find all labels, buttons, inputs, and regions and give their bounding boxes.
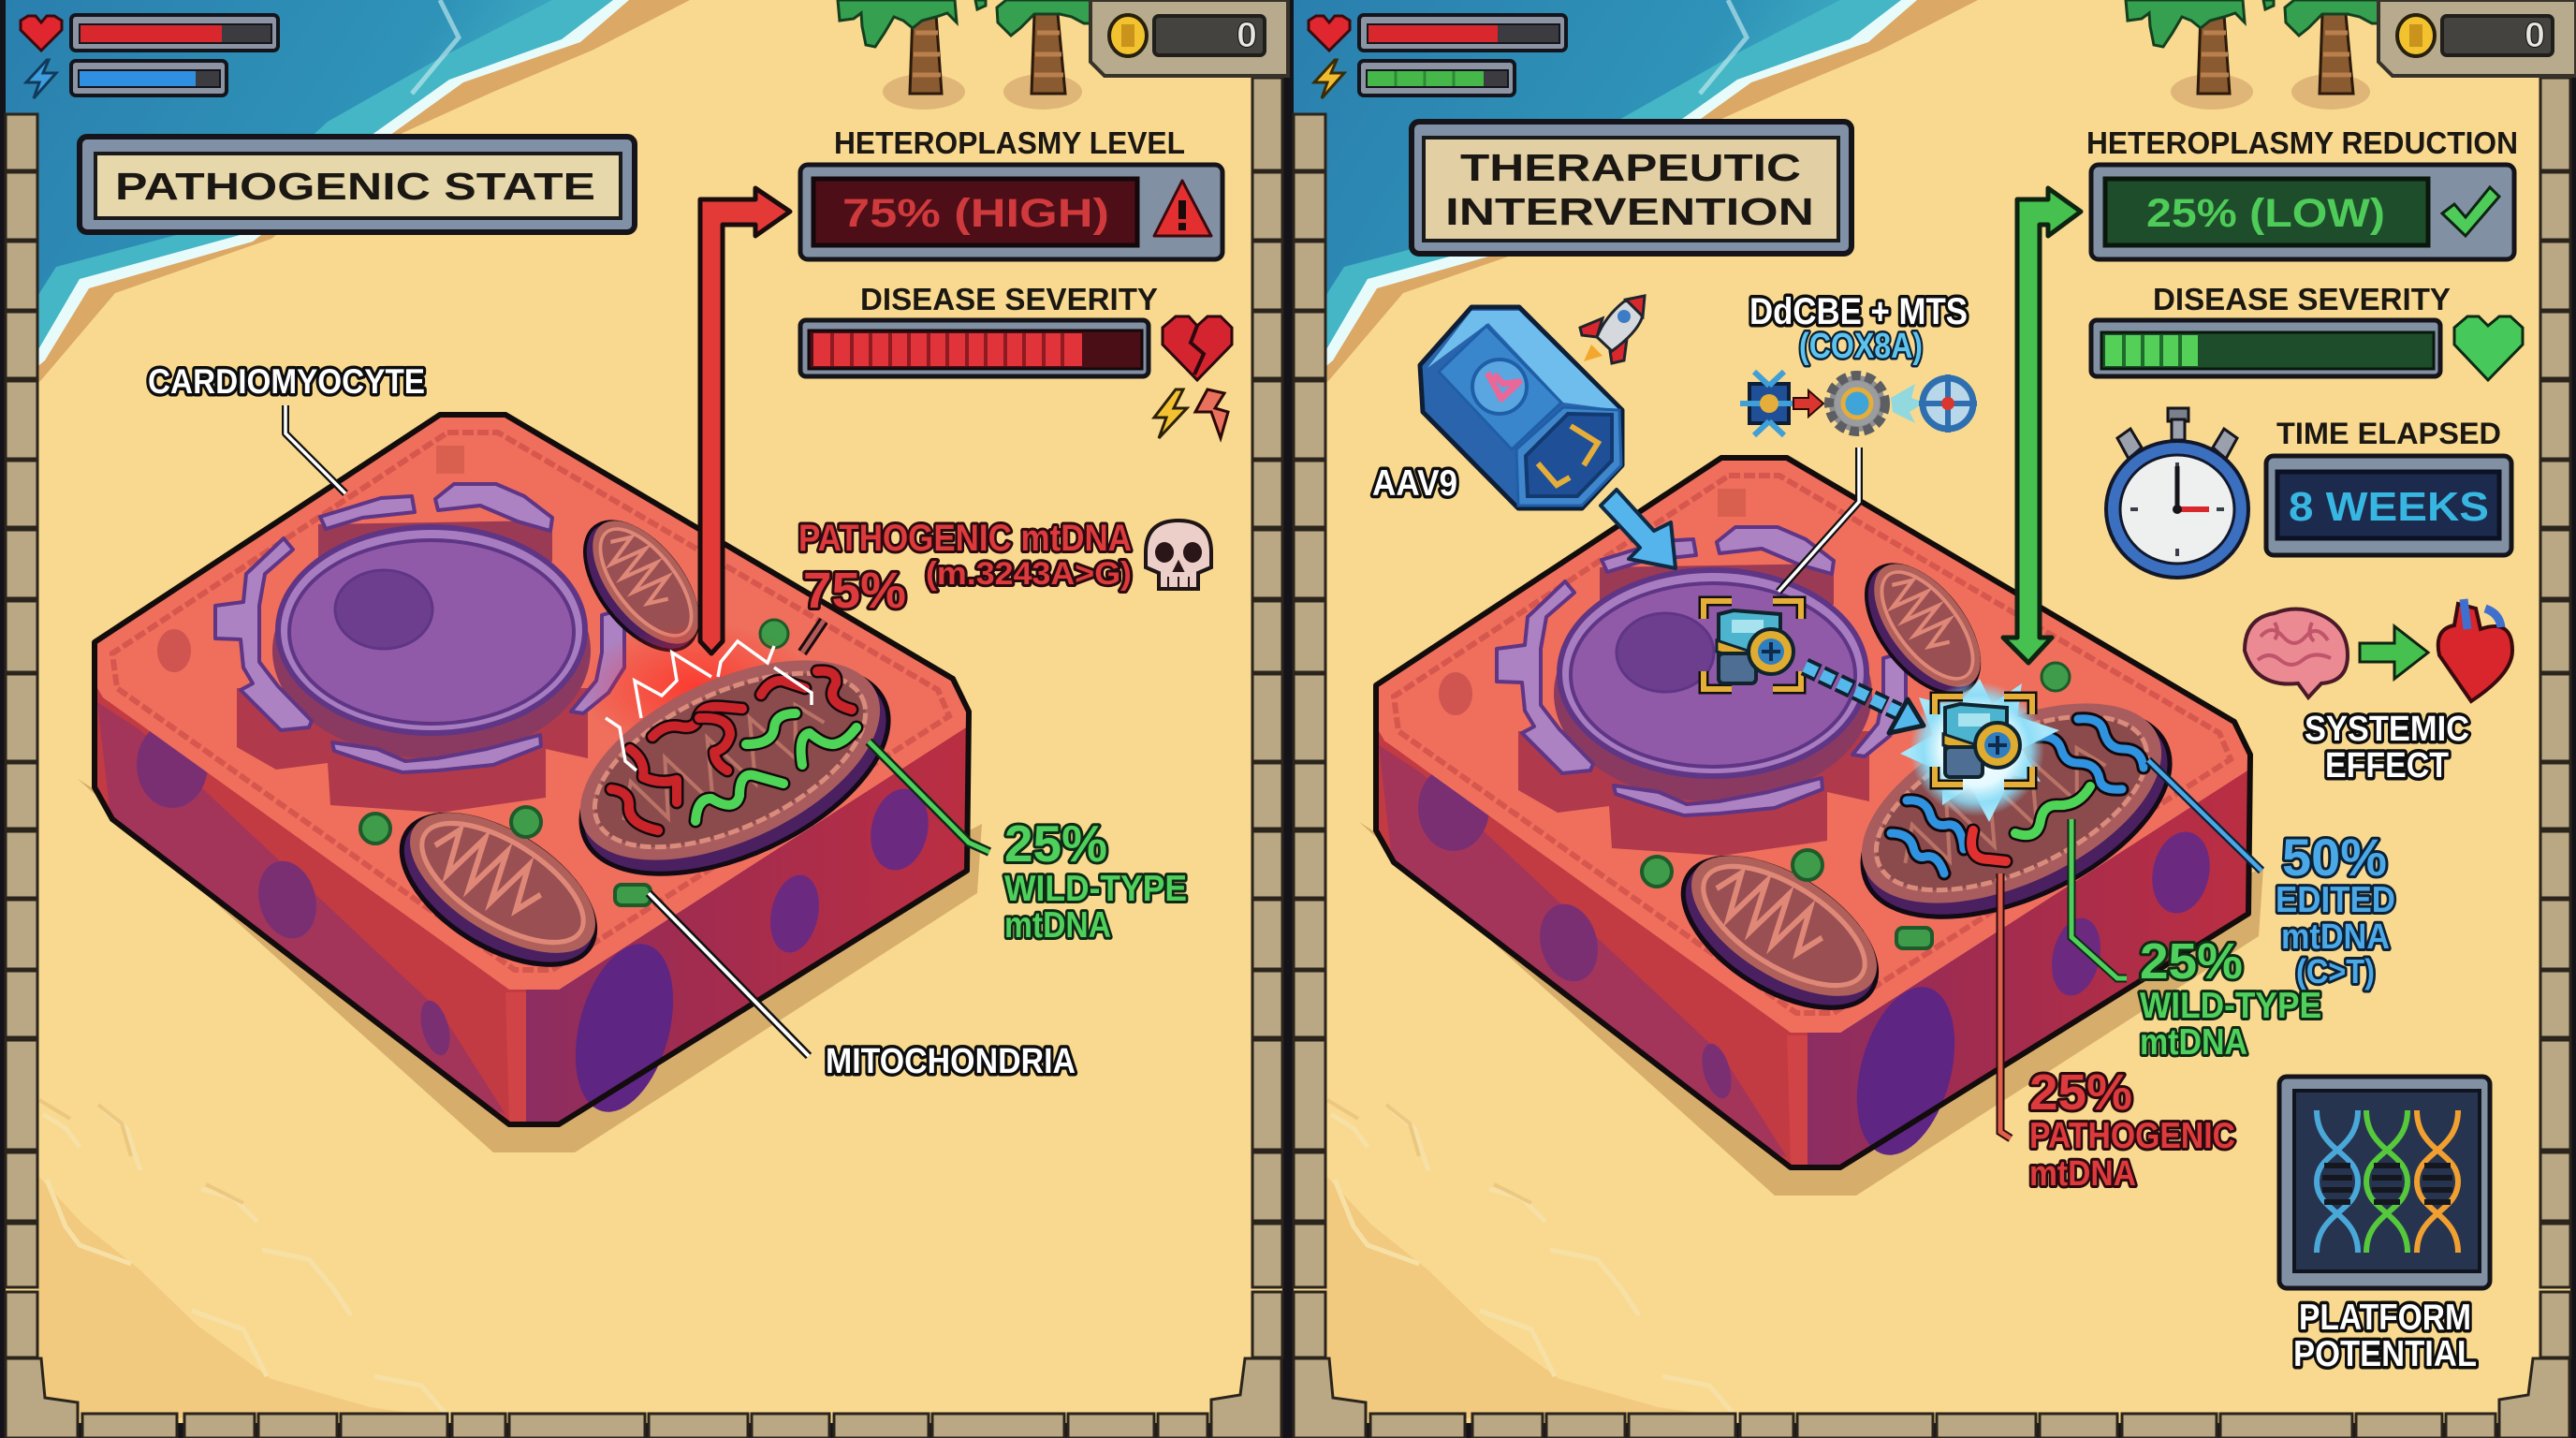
targeting brackets xyxy=(1704,601,1801,689)
icon: energy bolt xyxy=(1314,60,1344,98)
heading: disease severity: DISEASE SEVERITY xyxy=(860,282,1158,316)
label: platform: PLATFORM xyxy=(2299,1298,2471,1338)
energy bar xyxy=(71,61,227,95)
label: mtDNA: mtDNA xyxy=(2029,1154,2136,1194)
label: cardiomyocyte: CARDIOMYOCYTE xyxy=(148,362,425,401)
label: mitochondria: MITOCHONDRIA xyxy=(826,1042,1076,1081)
callout line: pathogenic inner xyxy=(2000,873,2011,1138)
coin counter value: 0 xyxy=(2525,16,2545,55)
pathogenic mtDNA strand xyxy=(1971,830,2006,861)
icon: check mark xyxy=(2442,187,2499,236)
editor machine xyxy=(1717,610,1793,683)
label: wild-type: WILD-TYPE xyxy=(1004,869,1187,909)
mitochondrion lower xyxy=(1658,826,1903,1038)
title: pathogenic state xyxy=(80,137,635,232)
label: AAV9: AAV9 xyxy=(1372,463,1457,504)
heading: time elapsed: TIME ELAPSED xyxy=(2276,417,2501,450)
coin counter value: 0 xyxy=(1237,16,1257,55)
blue helix xyxy=(2317,1110,2358,1253)
label: mtDNA: mtDNA xyxy=(2140,1022,2247,1063)
icon: health heart xyxy=(1309,16,1350,51)
nucleus xyxy=(215,484,624,813)
title: therapeutic intervention: INTERVENTION xyxy=(1445,190,1814,233)
icon: small red arrow xyxy=(1793,390,1823,417)
trajectory arrow head xyxy=(1889,699,1924,733)
arrow: red to heteroplasmy level xyxy=(700,188,790,653)
panel: pathogenic state xyxy=(6,0,1288,1438)
label: 25 percent pathogenic: 25% xyxy=(2029,1064,2132,1121)
mitochondrion upper xyxy=(1844,544,2002,713)
label: 25 percent wild type: 25% xyxy=(1004,814,1107,873)
callout line: pathogenic xyxy=(2000,873,2011,1138)
label: 50 percent: 50% xyxy=(2282,828,2387,887)
editor machine xyxy=(1943,704,2020,777)
callout line: editor xyxy=(1778,448,1859,592)
title: therapeutic intervention xyxy=(1412,122,1852,254)
treated mitochondrion xyxy=(1828,661,2202,960)
callout line: editor inner xyxy=(1778,448,1859,592)
label: wild-type: WILD-TYPE xyxy=(2140,986,2321,1026)
icon: brain xyxy=(2245,609,2348,697)
label: COX8A: (COX8A) xyxy=(1799,327,1923,366)
panel: therapeutic intervention xyxy=(1294,0,2576,1438)
beach background with walls xyxy=(6,0,1288,1438)
arrow: green to heteroplasmy reduction xyxy=(2003,188,2081,663)
icon: deaminase halves xyxy=(1740,372,1797,435)
label: 25 percent wild type: 25% xyxy=(2140,933,2243,990)
label: mtDNA: mtDNA xyxy=(2281,917,2390,957)
nucleus xyxy=(1497,527,1906,856)
cell body xyxy=(78,415,982,1152)
callout line: wild-type xyxy=(2071,819,2127,978)
arrow: capsid into cell xyxy=(1601,490,1676,568)
dashed blue trajectory xyxy=(1805,667,1898,712)
icon: gear xyxy=(1829,375,1885,432)
callout line: mitochondria inner xyxy=(649,893,809,1056)
cell: treated cardiomyocyte xyxy=(1359,458,2263,1196)
health bar xyxy=(71,15,278,51)
panel: heteroplasmy readout: 75% (HIGH) xyxy=(842,191,1109,236)
green helix xyxy=(2366,1110,2408,1253)
wild-type mtDNA strands xyxy=(695,713,856,821)
panel: heteroplasmy readout: 25% (LOW) xyxy=(2146,191,2385,236)
beach background with walls xyxy=(1294,0,2576,1438)
energy bar xyxy=(1359,61,1515,95)
heading: heteroplasmy reduction: HETEROPLASMY REDUCTION xyxy=(2086,125,2518,160)
severity gauge xyxy=(2091,320,2440,376)
label: mutation: (m.3243A>G) xyxy=(926,556,1132,592)
label: DdCBE + MTS: DdCBE + MTS xyxy=(1749,291,1968,332)
label: effect: EFFECT xyxy=(2325,746,2449,785)
callout line inner xyxy=(285,405,345,493)
callout line: wild-type xyxy=(869,741,989,852)
targeting brackets xyxy=(1935,697,2032,785)
mitochondrion upper xyxy=(563,501,721,670)
icon: cyan spray xyxy=(1891,384,1925,423)
callout line: pathogenic inner xyxy=(802,621,824,653)
arrow: brain to heart xyxy=(2360,626,2428,679)
icon: rocket xyxy=(1580,296,1645,363)
label: pathogenic mtDNA: PATHOGENIC mtDNA xyxy=(798,518,1132,559)
icon: anatomical heart xyxy=(2438,599,2512,701)
callout line: cardiomyocyte xyxy=(285,405,345,493)
icon: skull xyxy=(1146,521,1211,589)
wild-type mtDNA strand xyxy=(2015,786,2090,835)
damaged mitochondrion xyxy=(547,618,920,917)
icon: broken heart xyxy=(1163,316,1232,380)
callout line: edited inner xyxy=(2148,760,2261,871)
editor in nucleus xyxy=(1704,601,1801,689)
panel: heteroplasmy readout xyxy=(2091,165,2514,259)
icon: health heart xyxy=(21,16,62,51)
label: C to T: (C>T) xyxy=(2296,952,2375,990)
icon: AAV9 capsid xyxy=(1420,307,1622,508)
label: mtDNA: mtDNA xyxy=(1004,905,1111,946)
label: potential: POTENTIAL xyxy=(2293,1334,2477,1374)
label: 75 percent: 75% xyxy=(803,563,906,619)
callout line: wild-type inner xyxy=(869,741,989,852)
callout line: wild-type inner xyxy=(2071,819,2127,978)
callout line: edited xyxy=(2148,760,2261,871)
icon: stopwatch xyxy=(2106,408,2248,578)
mitochondrion lower xyxy=(376,783,622,995)
lightning sparks xyxy=(606,641,812,770)
icon: yellow bolt xyxy=(1154,389,1187,438)
cell: cardiomyocyte xyxy=(78,415,982,1152)
heading: heteroplasmy level: HETEROPLASMY LEVEL xyxy=(834,125,1185,160)
icon: green heart xyxy=(2454,316,2523,380)
editing burst xyxy=(1889,679,2059,822)
label: systemic: SYSTEMIC xyxy=(2305,710,2469,749)
label: edited: EDITED xyxy=(2276,880,2395,920)
title: pathogenic state: PATHOGENIC STATE xyxy=(115,165,595,208)
title: therapeutic intervention: THERAPEUTIC xyxy=(1460,146,1801,189)
edited mtDNA strands xyxy=(1891,719,2144,873)
severity gauge xyxy=(800,320,1149,376)
small green organelles xyxy=(1642,663,2070,948)
small green organelles xyxy=(360,620,788,905)
label: pathogenic: PATHOGENIC xyxy=(2029,1116,2235,1156)
panel: 8 weeks: 8 WEEKS xyxy=(2289,484,2489,530)
callout line: mitochondria xyxy=(649,893,809,1056)
health bar xyxy=(1359,15,1566,51)
icon: warning triangle xyxy=(1154,181,1211,236)
panel: heteroplasmy readout xyxy=(800,165,1222,259)
icon: red bolt xyxy=(1195,389,1228,438)
cell body xyxy=(1359,458,2263,1196)
panel: 8 weeks xyxy=(2266,456,2511,555)
pathogenic mtDNA strands xyxy=(611,671,852,830)
panel: platform potential icon xyxy=(2279,1077,2490,1288)
orange helix xyxy=(2417,1110,2458,1253)
icon: target xyxy=(1919,374,1977,433)
icon: energy bolt xyxy=(26,60,56,98)
callout line: pathogenic xyxy=(802,621,824,653)
glow of damage xyxy=(580,623,814,754)
heading: disease severity: DISEASE SEVERITY xyxy=(2153,282,2451,316)
